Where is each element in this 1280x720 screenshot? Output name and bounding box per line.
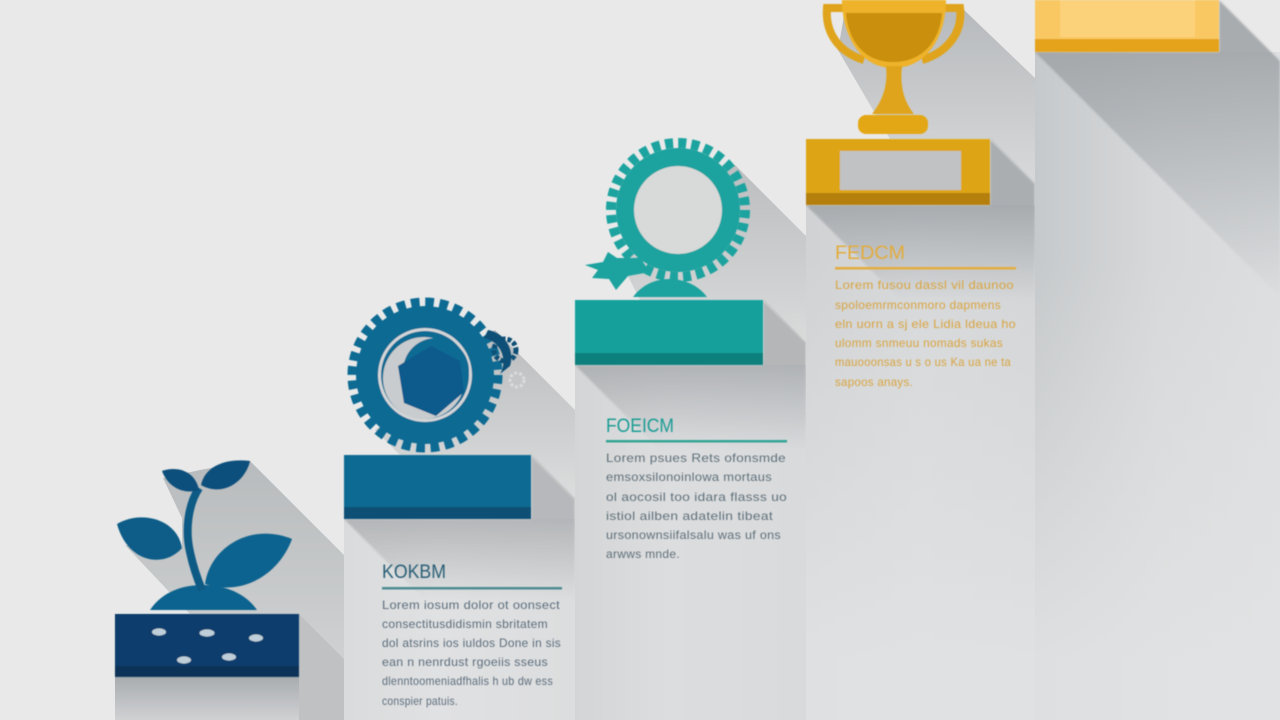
step 2: gear on block	[344, 302, 531, 519]
icon: blue gear	[352, 302, 524, 448]
body: step 2: ursonownsiifalsalu was uf ons	[606, 528, 781, 542]
body: step 2: emsoxsilonoinlowa mortaus	[606, 470, 772, 484]
body: step 2	[606, 451, 787, 561]
column shading under steps	[344, 52, 1280, 720]
body: step 1: ean n nenrdust rgoeiis sseus	[382, 655, 548, 669]
icon shadow: blue gear	[375, 330, 575, 500]
body: step 1: dlenntoomeniadfhalis h ub dw ess	[382, 674, 553, 688]
icon shadow: teal gear	[625, 165, 806, 345]
body: step 2: ol aocosil too idara flasss uo	[606, 490, 787, 504]
step 4: trophy on block	[806, 0, 990, 205]
block: step 1	[115, 614, 299, 677]
body: step 1: dol atsrins ios iuldos Done in sis	[382, 636, 561, 650]
heading: step 3: FEDCM	[835, 243, 905, 264]
icon: teal gear	[585, 143, 745, 297]
body: step 1: consectitusdidismin sbritatem	[382, 617, 548, 631]
block: step 3	[575, 300, 763, 365]
text block: step 1	[382, 562, 562, 708]
icon shadow: plant	[115, 461, 344, 677]
body: step 2: Lorem psues Rets ofonsmde	[606, 451, 786, 465]
block: step 5	[1035, 0, 1219, 52]
heading: step 1: KOKBM	[382, 562, 446, 583]
text block: step 2	[606, 416, 787, 561]
text block: step 3	[835, 243, 1016, 389]
body: step 3	[835, 278, 1016, 389]
body: step 1: Lorem iosum dolor ot oonsect	[382, 598, 560, 612]
icon: plant	[117, 460, 292, 610]
body: step 3: Lorem fusou dassl vil daunoo	[835, 278, 1014, 292]
body: step 3: eln uorn a sj ele Lidia ldeua ho	[835, 317, 1016, 331]
body: step 3: ulomm snmeuu nomads sukas	[835, 336, 1003, 350]
body: step 3: spoloemrmconmoro dapmens	[835, 298, 1001, 312]
heading: step 2: FOEICM	[606, 416, 674, 437]
icon shadow: trophy	[838, 8, 1035, 185]
body: step 3: mauooonsas u s o us Ka ua ne ta	[835, 355, 1011, 369]
block: step 4	[806, 139, 990, 205]
body: step 1: conspier patuis.	[382, 694, 458, 708]
body: step 1	[382, 598, 561, 708]
body: step 2: arwws mnde.	[606, 547, 680, 561]
step 3: gear on block	[575, 143, 763, 365]
body: step 3: sapoos anays.	[835, 375, 913, 389]
icon: trophy	[827, 0, 960, 134]
block: step 2	[344, 455, 531, 519]
step 1: plant on block	[115, 460, 299, 677]
body: step 2: istiol ailben adatelin tibeat	[606, 509, 773, 523]
